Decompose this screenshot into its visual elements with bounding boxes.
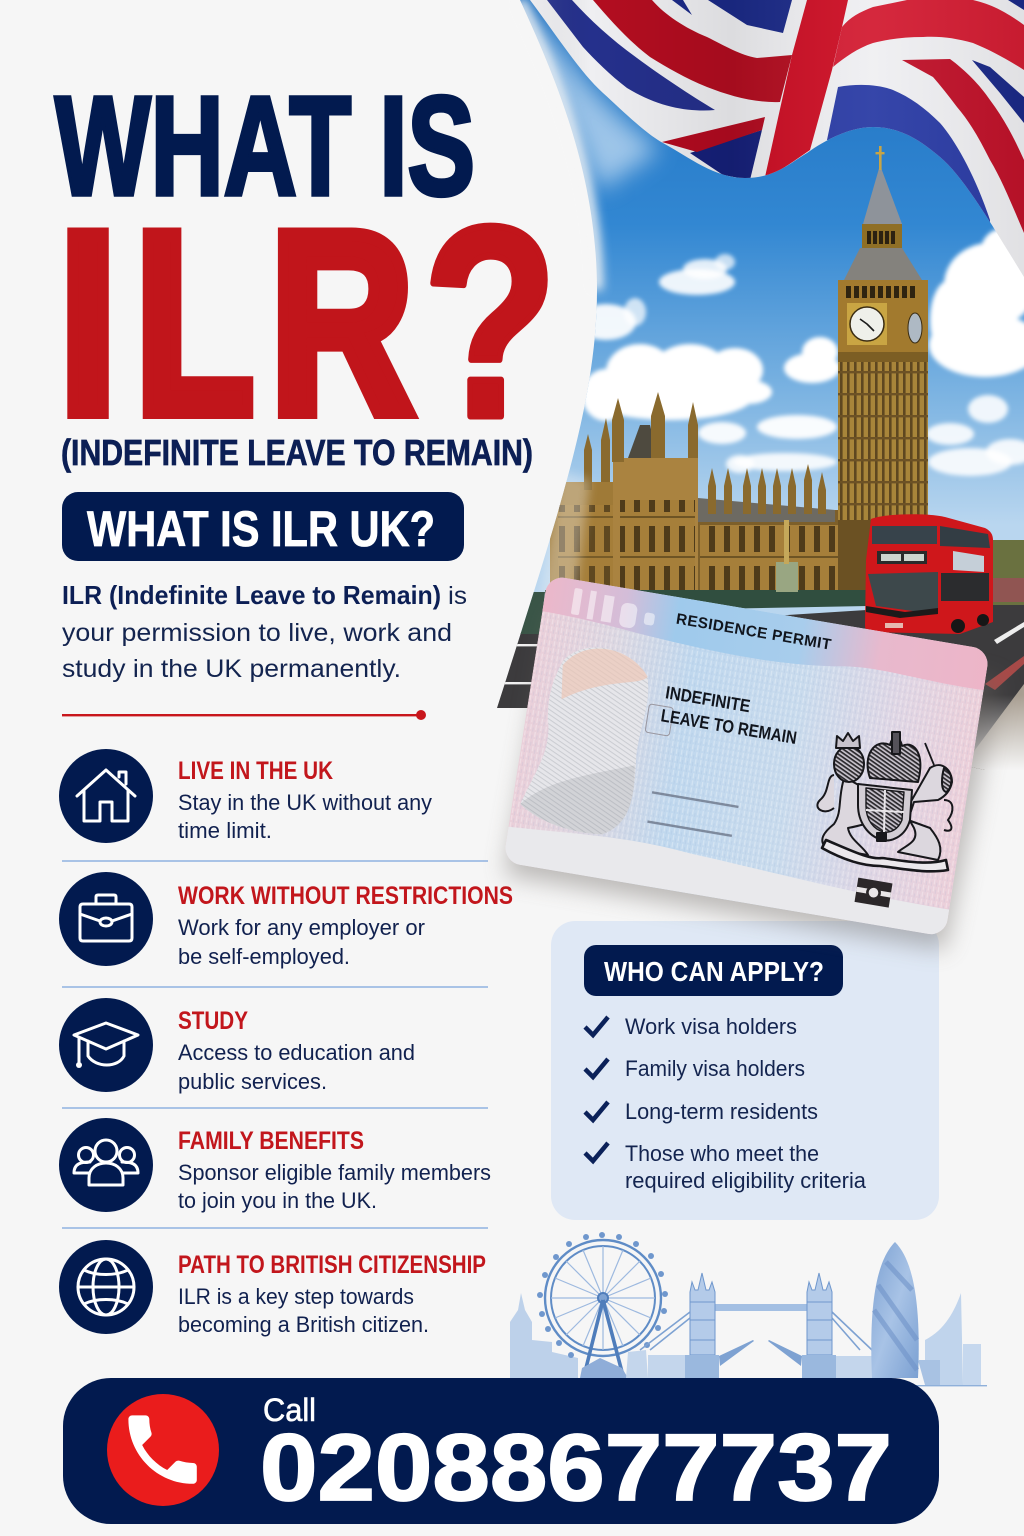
- supporter: unicorn: [925, 743, 934, 765]
- checklist item: long-term residents: Long-term residents: [625, 1099, 818, 1124]
- subtitle: Indefinite Leave to Remain: (INDEFINITE LEAVE TO REMAIN): [61, 432, 533, 473]
- title: ILR?: [59, 171, 558, 474]
- blue fields: [547, 0, 1024, 222]
- label: leave to remain: LEAVE TO REMAIN: [660, 705, 798, 748]
- benefit: study: [59, 998, 415, 1094]
- benefit: path to citizenship: ILR is a key step towards: [178, 1284, 414, 1309]
- haze near flag edge: [530, 0, 660, 190]
- benefit: path to citizenship: becoming a British citizen.: [178, 1312, 429, 1337]
- panel heading badge: [584, 945, 843, 996]
- white ghost marks on top band: [571, 588, 655, 628]
- panel: who can apply: [551, 921, 939, 1220]
- royal coat of arms on card: [817, 732, 952, 871]
- benefit: live in the UK: Stay in the UK without any: [178, 790, 432, 815]
- benefit: live in the UK: time limit.: [178, 818, 272, 843]
- title: WHAT IS: WHAT IS: [55, 66, 475, 224]
- benefit: family benefits: Sponsor eligible family members: [178, 1160, 491, 1185]
- label: residence permit: RESIDENCE PERMIT: [675, 611, 833, 654]
- checklist item: eligibility criteria: Those who meet the: [625, 1141, 819, 1166]
- benefit: family benefits: [59, 1118, 491, 1213]
- Tower Bridge: [626, 1273, 872, 1378]
- benefit: study: STUDY: [178, 1007, 248, 1035]
- benefit: work without restrictions: be self-employed.: [178, 944, 350, 969]
- benefit: family benefits: to join you in the UK.: [178, 1188, 377, 1213]
- small hologram: [645, 704, 674, 736]
- portrait ghost image: [520, 648, 648, 831]
- benefit: study: public services.: [178, 1069, 327, 1094]
- checklist item: work visa: Work visa holders: [625, 1014, 797, 1039]
- intro paragraph: study in the UK permanently.: [62, 655, 401, 683]
- title: ILR?: L: [135, 179, 254, 467]
- panel heading badge: WHO CAN APPLY?: [604, 956, 824, 987]
- Houses of Parliament: [540, 392, 843, 600]
- chip symbol: [855, 878, 892, 908]
- title: ILR?: R: [270, 179, 413, 467]
- benefit: live in the UK: LIVE IN THE UK: [178, 757, 333, 785]
- benefit: live in the UK: [59, 749, 432, 843]
- right fade below road: [972, 698, 1024, 770]
- benefit: work without restrictions: Work for any employer or: [178, 915, 425, 940]
- label: indefinite: INDEFINITE: [664, 682, 752, 716]
- white haze along the photo edge: [520, 0, 597, 290]
- intro paragraph: [62, 580, 467, 683]
- benefit: study: Access to education and: [178, 1040, 415, 1065]
- residence permit card: [503, 575, 990, 937]
- double-decker bus: [865, 514, 993, 634]
- checklist item: eligibility criteria: required eligibility criteria: [625, 1168, 867, 1193]
- shading: [520, 0, 1024, 290]
- icon: people: [59, 1118, 153, 1212]
- bottom band: [503, 820, 952, 937]
- shield: [858, 784, 912, 840]
- supporter: lion: [817, 775, 882, 855]
- checklist item: eligibility criteria: [585, 1141, 867, 1193]
- icon: house: [59, 749, 153, 843]
- motto ribbon: [822, 840, 948, 871]
- icon: globe: [59, 1240, 153, 1334]
- benefit: work without restrictions: WORK WITHOUT RESTRICTIONS: [178, 882, 513, 910]
- call label: Call: [263, 1392, 316, 1428]
- Big Ben tower: [838, 146, 928, 592]
- benefit: path to citizenship: PATH TO BRITISH CITIZENSHIP: [178, 1251, 486, 1279]
- call-to-action bar: [63, 1378, 939, 1524]
- London skyline illustration: [510, 1232, 987, 1386]
- Gherkin tower: [871, 1242, 919, 1378]
- intro paragraph: ILR (Indefinite Leave to Remain): [62, 580, 441, 610]
- icon: briefcase: [59, 872, 153, 966]
- icon: graduation cap: [59, 998, 153, 1092]
- card drop shadow: [505, 610, 1000, 950]
- red bands: [593, 0, 1024, 233]
- checklist item: family visa: Family visa holders: [625, 1056, 805, 1081]
- benefit: work without restrictions: [59, 872, 513, 969]
- intro paragraph: is: [448, 582, 467, 610]
- road and bridge: [497, 520, 1024, 770]
- royal crown: [868, 738, 920, 782]
- benefit: family benefits: FAMILY BENEFITS: [178, 1127, 364, 1155]
- buildings right: [915, 1293, 987, 1386]
- buildings left: [510, 1293, 578, 1378]
- title: ILR?: I: [59, 178, 117, 467]
- redacted lines: [652, 791, 739, 808]
- heading badge: what is ILR UK: WHAT IS ILR UK?: [87, 501, 435, 557]
- photo: London scene with Big Ben, Parliament and bus: [490, 0, 1024, 800]
- London Eye wheel: [537, 1232, 668, 1372]
- clouds: [576, 228, 1024, 476]
- red divider with dot: [62, 710, 426, 720]
- intro paragraph: your permission to live, work and: [62, 619, 452, 647]
- title: ILR?: ?: [423, 171, 558, 474]
- top band: [541, 575, 990, 697]
- benefit: path to citizenship: [59, 1240, 486, 1337]
- phone number: 02088677737: [260, 1415, 892, 1521]
- icon: phone: [107, 1394, 219, 1506]
- Union Jack flag banner: [520, 0, 1024, 290]
